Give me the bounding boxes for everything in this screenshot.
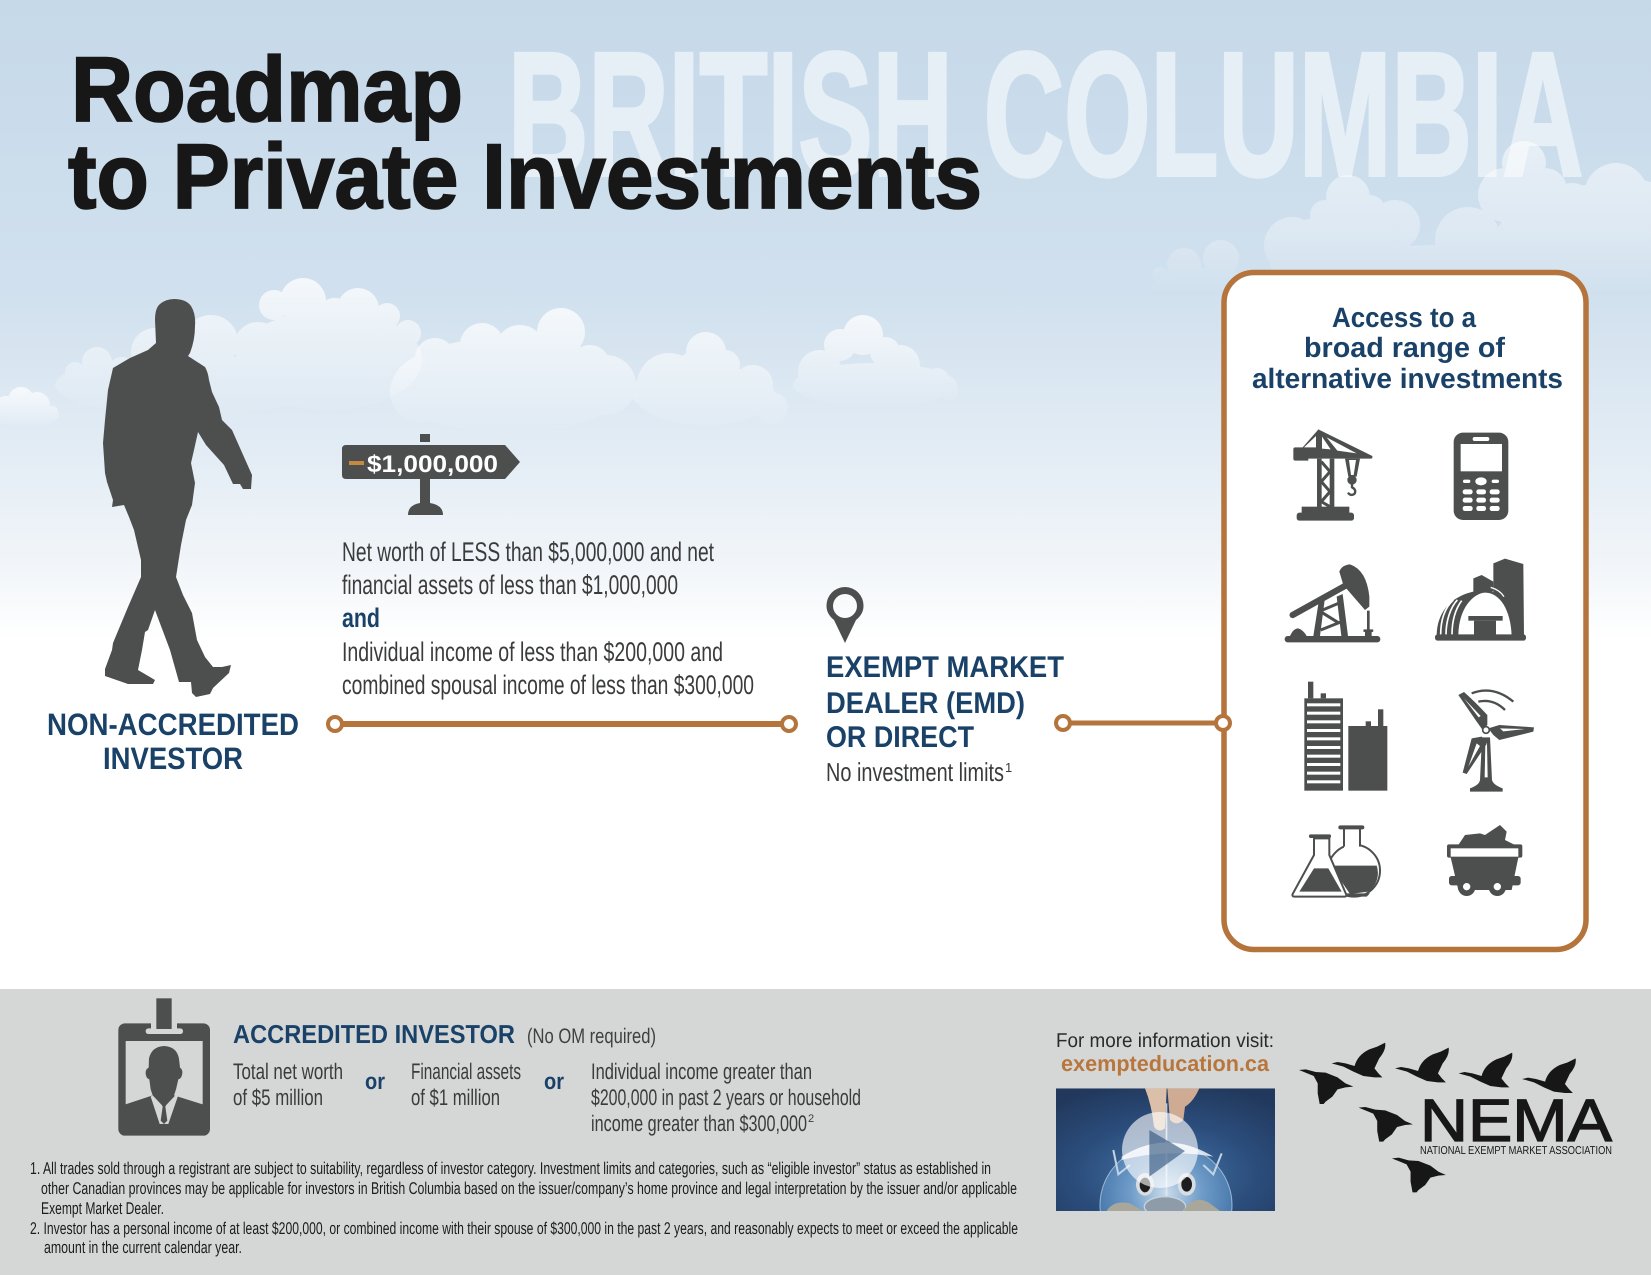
- footer band: [0, 989, 1651, 1275]
- text block: accredited criteria: income greater than $300,000: [591, 1111, 807, 1136]
- connector: investor to dealer: [328, 717, 796, 731]
- video thumbnail: piggy bank: [1056, 1088, 1275, 1211]
- panel heading: Access to a: [1332, 302, 1476, 333]
- text block: accredited criteria: [233, 1059, 861, 1136]
- heading: non-accredited investor: NON-ACCREDITED: [47, 707, 299, 742]
- footnotes: [30, 1159, 1018, 1257]
- text block: non-accredited criteria: financial assets of less than $1,000,000: [342, 570, 678, 600]
- panel heading: alternative investments: [1252, 363, 1563, 394]
- heading: exempt market dealer: OR DIRECT: [826, 721, 974, 754]
- icon: road sign $1,000,000: $1,000,000: [367, 451, 498, 478]
- heading: non-accredited investor: INVESTOR: [103, 741, 243, 776]
- text block: accredited criteria: or: [365, 1068, 385, 1094]
- icon: road sign $1,000,000: [342, 434, 520, 515]
- connector: dealer to investments: [1056, 716, 1230, 730]
- text block: non-accredited criteria: and: [342, 603, 380, 633]
- icon: map pin: [826, 587, 864, 643]
- panel heading: broad range of: [1304, 332, 1506, 363]
- footnotes: other Canadian provinces may be applicable for investors in British Columbia based on the issuer/company’s home province and legal interpretation by the issuer and/or applicable: [41, 1179, 1017, 1198]
- title: to Private Investments: [68, 126, 982, 228]
- text block: accredited criteria: Total net worth: [233, 1059, 343, 1084]
- icon: hangar with silo: [1435, 559, 1526, 641]
- title: [68, 39, 982, 228]
- icon: chemistry flasks: [1292, 825, 1380, 897]
- icon: walking man silhouette: [103, 299, 252, 697]
- text block: accredited criteria: of $5 million: [233, 1085, 323, 1110]
- text block: accredited criteria: 2: [808, 1113, 814, 1125]
- logo: NEMA with geese: NEMA: [1420, 1087, 1612, 1154]
- text block: non-accredited criteria: Net worth of LESS than $5,000,000 and net: [342, 537, 714, 567]
- footnotes: amount in the current calendar year.: [44, 1238, 242, 1257]
- sky background: [0, 0, 1651, 640]
- panel heading: [1252, 302, 1563, 394]
- icon: office buildings: [1304, 682, 1387, 791]
- heading: non-accredited investor: [47, 707, 299, 776]
- panel: alternative investments: [1224, 272, 1586, 950]
- heading: exempt market dealer: DEALER (EMD): [826, 687, 1025, 720]
- clouds: [0, 140, 1651, 433]
- text block: accredited criteria: or: [544, 1068, 564, 1094]
- logo: NEMA with geese: NATIONAL EXEMPT MARKET ASSOCIATION: [1420, 1145, 1612, 1157]
- heading: exempt market dealer: No investment limits: [826, 757, 1004, 787]
- more information link: For more information visit:: [1056, 1030, 1274, 1052]
- text block: accredited criteria: Individual income greater than: [591, 1059, 812, 1084]
- icon: ID badge: [118, 998, 210, 1136]
- heading: exempt market dealer: EXEMPT MARKET: [826, 651, 1064, 684]
- text block: non-accredited criteria: [342, 537, 754, 700]
- logo: NEMA with geese: [1299, 1043, 1612, 1192]
- text block: non-accredited criteria: Individual income of less than $200,000 and: [342, 637, 723, 667]
- footnotes: Exempt Market Dealer.: [41, 1199, 164, 1218]
- footnotes: 2. Investor has a personal income of at least $200,000, or combined income with their spouse of $300,000 in the past 2 years, and reasonably expects to meet or exceed the applicable: [30, 1219, 1018, 1238]
- heading: exempt market dealer: [826, 651, 1064, 787]
- icon: mobile phone: [1454, 433, 1508, 520]
- text block: accredited criteria: $200,000 in past 2 years or household: [591, 1085, 861, 1110]
- heading: exempt market dealer: 1: [1005, 760, 1012, 775]
- title: Roadmap: [71, 39, 463, 141]
- more information link: exempteducation.ca: [1061, 1051, 1270, 1076]
- icon: wind turbine: [1458, 691, 1534, 792]
- investment icons: [1285, 429, 1534, 897]
- play button: [1122, 1112, 1198, 1188]
- icon: coal cart: [1447, 825, 1522, 896]
- text block: accredited criteria: of $1 million: [411, 1085, 500, 1110]
- geese formation: [1299, 1043, 1576, 1192]
- footnotes: 1. All trades sold through a registrant are subject to suitability, regardless of investor category. Investment limits and categories, such as “eligible investor” status as established in: [30, 1159, 991, 1178]
- text block: non-accredited criteria: combined spousal income of less than $300,000: [342, 670, 754, 700]
- heading: accredited investor: (No OM required): [527, 1025, 656, 1048]
- heading: accredited investor: ACCREDITED INVESTOR: [233, 1019, 515, 1049]
- icon: oil pumpjack: [1285, 564, 1380, 642]
- icon: crane: [1293, 429, 1372, 521]
- more information link: [1056, 1030, 1274, 1076]
- text block: accredited criteria: Financial assets: [411, 1059, 521, 1084]
